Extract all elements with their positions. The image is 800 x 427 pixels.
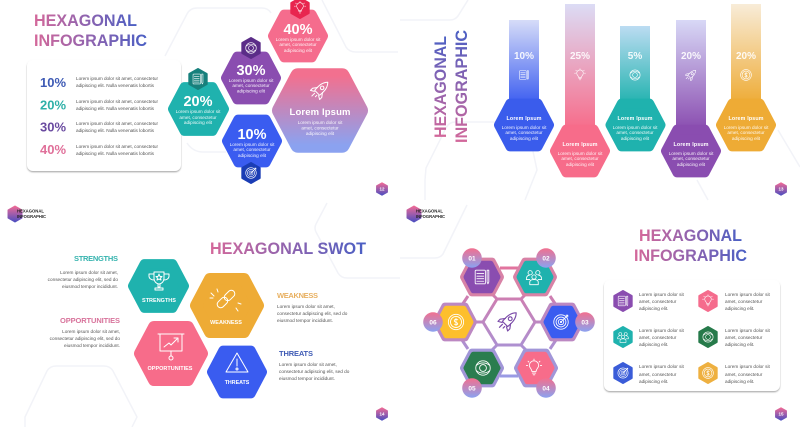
title: hexagonal swot: HEXAGONAL SWOT: [210, 240, 366, 258]
hexagon: 40% pink: amet, consectetur: [279, 42, 317, 47]
logo: slide 15: [407, 206, 445, 222]
list row 30%: 30%: [40, 120, 66, 134]
item pink: adipiscing elit.: [725, 306, 754, 311]
hexagon: 20% teal: amet, consectetur: [179, 115, 217, 120]
text block: strengths: eiusmod tempor incididunt.: [62, 284, 118, 289]
item teal: Lorem ipsum dolor sit: [639, 328, 685, 333]
hexagon: central Lorem Ipsum: Lorem Ipsum: [290, 107, 350, 118]
hexagon: 40% pink: [273, 0, 323, 58]
hexagon: 20% teal: adipiscing elit: [184, 120, 213, 125]
column: 10% blue: Lorem ipsum dolor sit: [502, 125, 547, 130]
hexagon: 20% teal: Lorem ipsum dolor sit: [176, 109, 221, 114]
logo: slide 14: HEXAGONAL: [17, 208, 44, 214]
hexagon: weakness: [196, 279, 258, 332]
column: 25% pink: adipiscing elit: [566, 162, 595, 167]
hexagon: central Lorem Ipsum: [280, 76, 360, 145]
hexagon: 20% teal: [173, 69, 224, 131]
hexagon 05: 05: [468, 386, 476, 392]
column: 25% pink: [555, 4, 605, 173]
page number 14: [377, 408, 387, 420]
column: 5% teal: Lorem ipsum dolor sit: [613, 125, 658, 130]
item purple: adipiscing elit.: [639, 306, 668, 311]
page number 15: [776, 408, 786, 420]
hexagon: central Lorem Ipsum: amet, consectetur: [301, 126, 339, 130]
list row 20%: adipiscing elit. Nulla venenatis lobortis: [76, 106, 155, 111]
hexagon: 10% blue: amet, consectetur: [233, 147, 271, 152]
item blue: adipiscing elit.: [639, 379, 668, 384]
hexagon 02: [517, 248, 556, 293]
item pink: amet, consectetur: [725, 299, 763, 304]
hexagon 03: [544, 306, 595, 338]
list row 30%: Lorem ipsum dolor sit amet, consectetur: [76, 121, 158, 126]
list row 20%: 20%: [40, 98, 66, 112]
hexagon: 40% pink: adipiscing elit: [284, 48, 313, 53]
title: hexagonal infographic slide 12: [34, 12, 147, 50]
list row 40%: [40, 142, 158, 157]
logo: slide 14: [8, 206, 46, 222]
page number 12: [377, 183, 387, 195]
column: 20% purple: [666, 20, 716, 173]
page number 12: 12: [379, 186, 385, 192]
column: 5% teal: [610, 26, 661, 147]
item purple: amet, consectetur: [639, 299, 677, 304]
column: 10% blue: amet, consectetur: [505, 130, 543, 135]
list row 40%: 40%: [40, 142, 66, 157]
column: 20% orange: adipiscing elit: [732, 136, 761, 141]
title: rotated hexagonal infographic: [432, 30, 471, 143]
column: 5% teal: adipiscing elit: [621, 136, 650, 141]
hexagon 06: [423, 306, 473, 338]
column: 20% orange: [721, 4, 771, 147]
hexagon: 10% blue: 10%: [237, 127, 267, 143]
item orange: [699, 363, 771, 384]
column: 25% pink: Lorem ipsum dolor sit: [558, 151, 603, 156]
column: 25% pink: amet, consectetur: [561, 156, 599, 161]
list row 10%: Lorem ipsum dolor sit amet, consectetur: [76, 76, 158, 81]
list row 30%: [40, 120, 158, 134]
title: rotated hexagonal infographic: HEXAGONAL: [432, 36, 450, 138]
column: 20% purple: adipiscing elit: [677, 162, 706, 167]
item green: Lorem ipsum dolor sit: [725, 328, 771, 333]
panel: slide 15 background hexagon outlines: [400, 205, 467, 258]
title: hexagonal infographic slide 15: INFOGRAPHIC: [634, 247, 747, 265]
hexagon: opportunities: OPPORTUNITIES: [148, 366, 193, 372]
hexagon: 20% teal: 20%: [183, 94, 213, 110]
text block: threats: [279, 349, 350, 381]
panel: slide 13 background hexagon outlines: [400, 0, 800, 200]
hexagon: 40% pink: 40%: [283, 22, 313, 38]
item teal: amet, consectetur: [639, 335, 677, 340]
text block: opportunities: Lorem ipsum dolor sit amet,: [62, 329, 120, 334]
text block: opportunities: consectetur adipiscing elit, sed do: [50, 336, 120, 341]
page number 13: [776, 183, 786, 195]
hexagon: threats: [212, 350, 262, 394]
column: 10% blue: Lorem Ipsum: [506, 116, 542, 122]
hexagon: 40% pink: Lorem ipsum dolor sit: [276, 37, 321, 42]
title: hexagonal infographic slide 15: [634, 227, 747, 265]
hexagon: strengths: [133, 264, 184, 308]
item pink: [699, 291, 771, 311]
panel: icon list card: [604, 280, 780, 391]
item pink: Lorem ipsum dolor sit: [725, 292, 771, 297]
title: hexagonal infographic slide 15: HEXAGONAL: [639, 227, 742, 245]
hexagon: 30% purple: [226, 38, 276, 100]
hexagon 01: 01: [468, 256, 476, 262]
item purple: Lorem ipsum dolor sit: [639, 292, 685, 297]
hexagon: 10% blue: adipiscing elit: [238, 153, 267, 158]
hexagon: opportunities: [140, 327, 202, 380]
column: 10% blue: [499, 20, 549, 147]
item green: amet, consectetur: [725, 335, 763, 340]
hexagon 03: 03: [581, 320, 589, 326]
list row 20%: [40, 98, 158, 112]
hexagon: 30% purple: Lorem ipsum dolor sit: [229, 78, 274, 83]
list row 10%: 10%: [40, 75, 66, 90]
hexagon network diagram: [423, 248, 595, 398]
hexagon 01: [462, 248, 500, 293]
logo: slide 14: INFOGRAPHIC: [17, 214, 46, 219]
item orange: adipiscing elit.: [725, 379, 754, 384]
text block: strengths: Lorem ipsum dolor sit amet,: [60, 270, 118, 275]
list row 10%: adipiscing elit. Nulla venenatis lobortis: [76, 83, 155, 88]
text block: threats: THREATS: [279, 349, 313, 358]
column: 20% orange: 20%: [736, 51, 756, 62]
text block: weakness: [277, 291, 348, 323]
text block: threats: eiusmod tempor incididunt.: [279, 376, 335, 381]
text block: weakness: Lorem ipsum dolor sit amet,: [277, 304, 335, 309]
item blue: Lorem ipsum dolor sit: [639, 364, 685, 369]
logo: slide 15: HEXAGONAL: [416, 208, 443, 214]
center hexagon rocket: [496, 308, 521, 333]
text block: weakness: consectetur adipiscing elit, sed do: [277, 311, 348, 316]
item blue: amet, consectetur: [639, 372, 677, 377]
item green: adipiscing elit.: [725, 342, 754, 347]
list row 30%: adipiscing elit. Nulla venenatis lobortis: [76, 128, 155, 133]
text block: strengths: consectetur adipiscing elit, sed do: [48, 277, 118, 282]
column: 5% teal: Lorem Ipsum: [618, 116, 653, 122]
panel: slide 14 background hexagon outlines: [25, 203, 400, 427]
panel: percentage list card: [27, 60, 181, 171]
page number 15: 15: [778, 412, 784, 416]
hexagon: 30% purple: amet, consectetur: [232, 83, 270, 88]
hexagon: threats: THREATS: [225, 380, 250, 386]
hexagon 04: 04: [542, 386, 550, 392]
logo: slide 15: INFOGRAPHIC: [416, 214, 445, 219]
column: 5% teal: 5%: [628, 51, 642, 62]
item blue: [614, 363, 685, 384]
text block: threats: consectetur adipiscing elit, sed do: [279, 369, 350, 374]
column: 10% blue: adipiscing elit: [510, 136, 539, 141]
item green: [699, 327, 771, 347]
hexagon: weakness: WEAKNESS: [210, 320, 242, 326]
column: 20% purple: Lorem ipsum dolor sit: [669, 151, 714, 156]
hexagon 02: 02: [542, 256, 550, 262]
hexagon 05: [462, 352, 500, 398]
hexagon: 30% purple: adipiscing elit: [237, 88, 266, 94]
hexagon 06: 06: [429, 320, 437, 326]
title: hexagonal infographic slide 12: HEXAGONAL: [34, 12, 137, 30]
text block: opportunities: eiusmod tempor incididunt.: [64, 343, 120, 348]
column: 25% pink: 25%: [570, 51, 590, 62]
list row 40%: Lorem ipsum dolor sit amet, consectetur: [76, 144, 158, 149]
list row 40%: adipiscing elit. Nulla venenatis lobortis: [76, 151, 155, 156]
text block: weakness: eiusmod tempor incididunt.: [277, 318, 333, 323]
text block: strengths: STRENGTHS: [74, 254, 118, 263]
text block: opportunities: OPPORTUNITIES: [60, 316, 120, 325]
item teal: adipiscing elit.: [639, 342, 668, 347]
hexagon: central Lorem Ipsum: Lorem ipsum dolor sit: [298, 120, 343, 125]
column: 20% orange: Lorem ipsum dolor sit: [724, 125, 769, 130]
column: 20% purple: 20%: [681, 51, 701, 62]
text block: strengths: [48, 254, 118, 289]
column: 10% blue: 10%: [514, 51, 534, 62]
title: hexagonal infographic slide 12: INFOGRAPHIC: [34, 32, 147, 50]
list row 20%: Lorem ipsum dolor sit amet, consectetur: [76, 99, 158, 104]
item teal: [614, 327, 685, 347]
column: 20% purple: amet, consectetur: [672, 156, 710, 161]
item orange: Lorem ipsum dolor sit: [725, 364, 771, 369]
hexagon 04: [518, 352, 556, 398]
hexagon: 10% blue: Lorem ipsum dolor sit: [230, 142, 275, 147]
hexagon: 10% blue: [227, 119, 277, 183]
page number 14: 14: [379, 412, 385, 416]
text block: threats: Lorem ipsum dolor sit amet,: [279, 362, 337, 367]
text block: weakness: WEAKNESS: [277, 291, 318, 300]
panel: slide 12 background hexagon outlines: [165, 0, 398, 152]
text block: opportunities: [50, 316, 120, 348]
title: rotated hexagonal infographic: INFOGRAPHIC: [453, 30, 471, 143]
hexagon: 30% purple: 30%: [236, 63, 266, 79]
hexagon: strengths: STRENGTHS: [142, 298, 176, 304]
column: 20% orange: Lorem Ipsum: [728, 116, 764, 122]
page number 13: 13: [778, 186, 784, 192]
column: 5% teal: amet, consectetur: [616, 130, 654, 135]
list row 10%: [40, 75, 158, 90]
item purple: [614, 291, 685, 311]
column: 25% pink: Lorem Ipsum: [562, 142, 598, 148]
column: 20% orange: amet, consectetur: [727, 130, 765, 135]
hexagon: central Lorem Ipsum: adipiscing elit: [306, 131, 335, 136]
item orange: amet, consectetur: [725, 372, 763, 377]
column: 20% purple: Lorem Ipsum: [674, 142, 709, 148]
